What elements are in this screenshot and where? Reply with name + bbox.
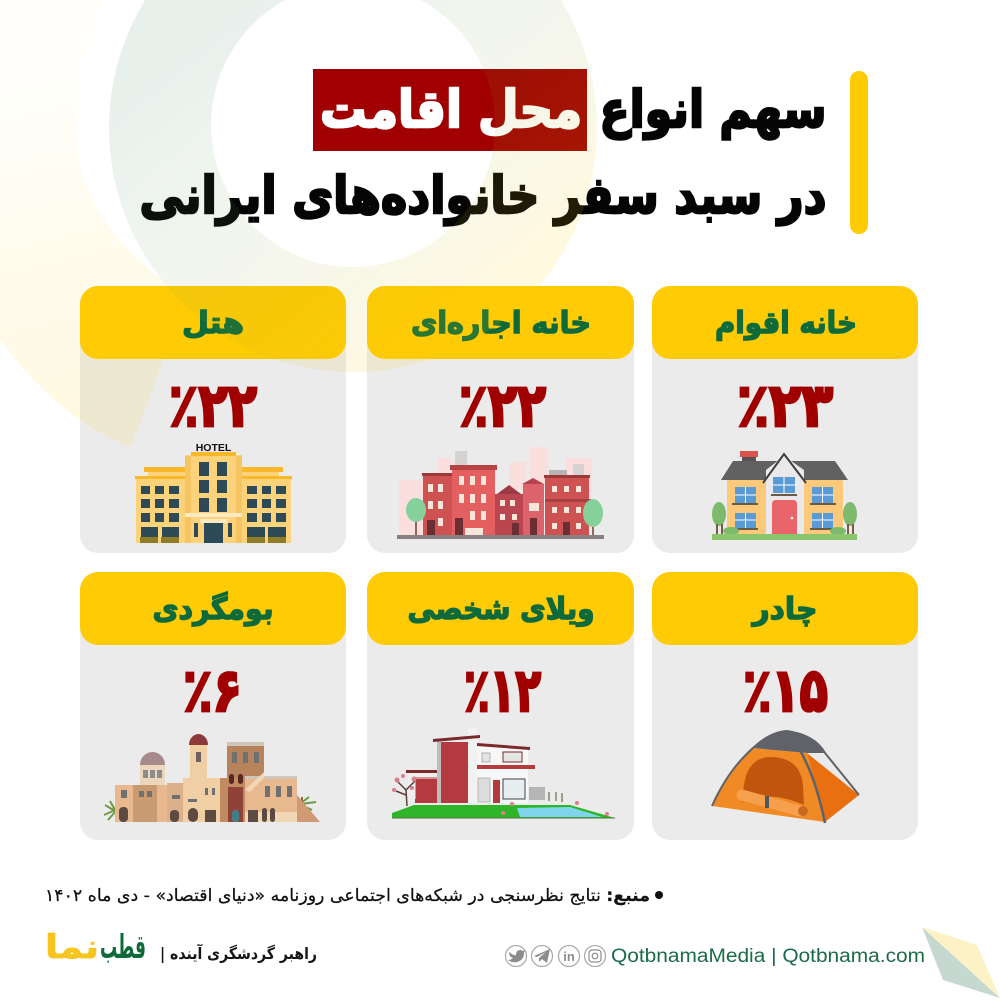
value: eco-lodge: ٪۶ xyxy=(183,656,242,726)
header: rental house xyxy=(367,286,634,359)
header: tent xyxy=(652,572,918,645)
label: rental house: خانه اجاره‌ای xyxy=(411,306,591,341)
icon: villa with pool xyxy=(392,728,615,818)
label: hotel: هتل xyxy=(182,306,244,341)
value: relatives' house: ٪۲۳ xyxy=(737,371,833,441)
label: tent: چادر xyxy=(751,592,818,627)
icon: apartment buildings xyxy=(397,447,604,539)
header: eco-lodge xyxy=(80,572,346,645)
panel: eco-lodge xyxy=(80,572,346,840)
icon: twitter xyxy=(506,946,526,966)
title line 1: سهم انواع xyxy=(600,81,826,140)
panel: tent xyxy=(652,572,918,840)
panel: rental house xyxy=(367,286,634,553)
title xyxy=(140,69,826,226)
tagline: راهبر گردشگری آینده | xyxy=(160,943,317,964)
label: private villa: ویلای شخصی xyxy=(408,592,594,627)
value: rental house: ٪۲۲ xyxy=(459,371,546,441)
panel: private villa xyxy=(367,572,634,840)
brand logo xyxy=(45,927,146,966)
value: hotel: ٪۲۲ xyxy=(169,371,257,441)
panel: hotel xyxy=(80,286,346,553)
icon: house xyxy=(712,451,857,540)
icon: traditional adobe buildings xyxy=(104,734,320,822)
label: eco-lodge: بومگردی xyxy=(152,591,274,627)
icon: linkedin: in xyxy=(563,949,575,964)
social media icons xyxy=(506,946,606,966)
header: relatives' house xyxy=(652,286,918,359)
header: hotel xyxy=(80,286,346,359)
icon: instagram xyxy=(584,946,606,966)
title accent bar xyxy=(850,71,868,234)
title highlighted words: محل اقامت xyxy=(320,81,582,140)
value: private villa: ٪۱۲ xyxy=(464,656,541,726)
title highlight box xyxy=(313,69,587,151)
header: private villa xyxy=(367,572,634,645)
panel: relatives' house xyxy=(652,286,918,553)
value: tent: ٪۱۵ xyxy=(743,656,828,726)
icon: hotel building: HOTEL xyxy=(196,442,232,454)
website and social handle: QotbnamaMedia | Qotbnama.com xyxy=(611,946,925,967)
brand logo: نما xyxy=(45,927,99,966)
decorative kite shape xyxy=(922,927,1000,998)
icon: tent xyxy=(712,731,859,823)
source note: منبع: نتایج نظرسنجی در شبکه‌های اجتماعی روزنامه «دنیای اقتصاد» - دی ماه ۱۴۰۲ xyxy=(45,886,650,906)
icon: hotel building xyxy=(135,442,292,543)
background arcs overlay xyxy=(0,0,597,447)
label: relatives' house: خانه اقوام xyxy=(715,306,857,341)
brand logo: قطب xyxy=(100,927,146,966)
title line 2: در سبد سفر خانواده‌های ایرانی xyxy=(140,167,826,226)
icon: telegram xyxy=(532,946,552,966)
